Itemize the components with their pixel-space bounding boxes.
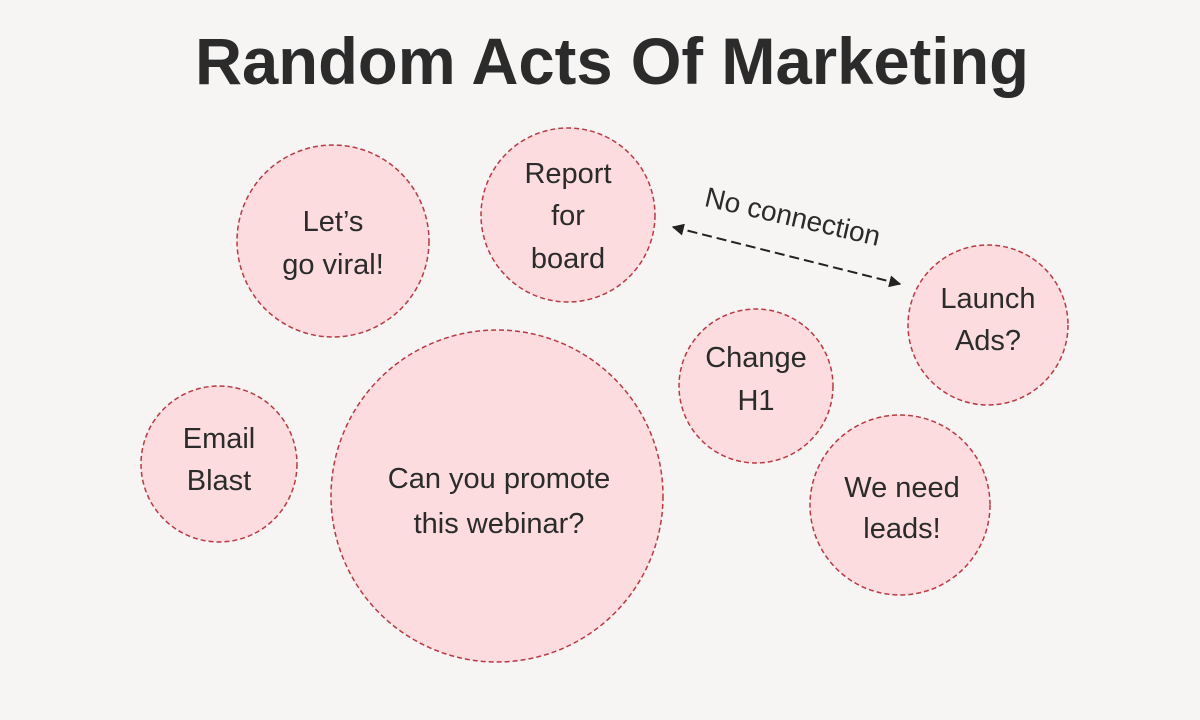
bubble: change H1: H1 [737, 385, 775, 417]
bubble: let's go viral: Let’s [303, 206, 363, 238]
bubble: change H1: Change [705, 342, 807, 374]
bubble: promote webinar [331, 330, 663, 662]
bubble: report for board [481, 128, 655, 302]
bubble: promote webinar: Can you promote [388, 463, 610, 495]
bubble: launch ads: Ads? [955, 325, 1021, 357]
bubble: launch ads [908, 245, 1068, 405]
bubble: email blast: Blast [187, 465, 251, 497]
bubble: report for board: Report [524, 158, 612, 190]
title: Random Acts Of Marketing [195, 24, 1029, 98]
bubble: email blast [141, 386, 297, 542]
bubble: we need leads: We need [844, 472, 960, 504]
bubble: we need leads: leads! [863, 513, 941, 545]
arrow: no connection: No connection [702, 181, 883, 252]
arrow: no connection [673, 181, 900, 284]
bubble: let's go viral [237, 145, 429, 337]
bubble: let's go viral: go viral! [282, 249, 384, 281]
bubble: report for board: for [551, 200, 585, 232]
bubble: change H1 [679, 309, 833, 463]
bubble: report for board: board [531, 243, 605, 275]
bubble: promote webinar: this webinar? [414, 508, 584, 540]
bubble: email blast: Email [183, 423, 255, 455]
bubble: launch ads: Launch [940, 283, 1036, 315]
bubble: we need leads [810, 415, 990, 595]
